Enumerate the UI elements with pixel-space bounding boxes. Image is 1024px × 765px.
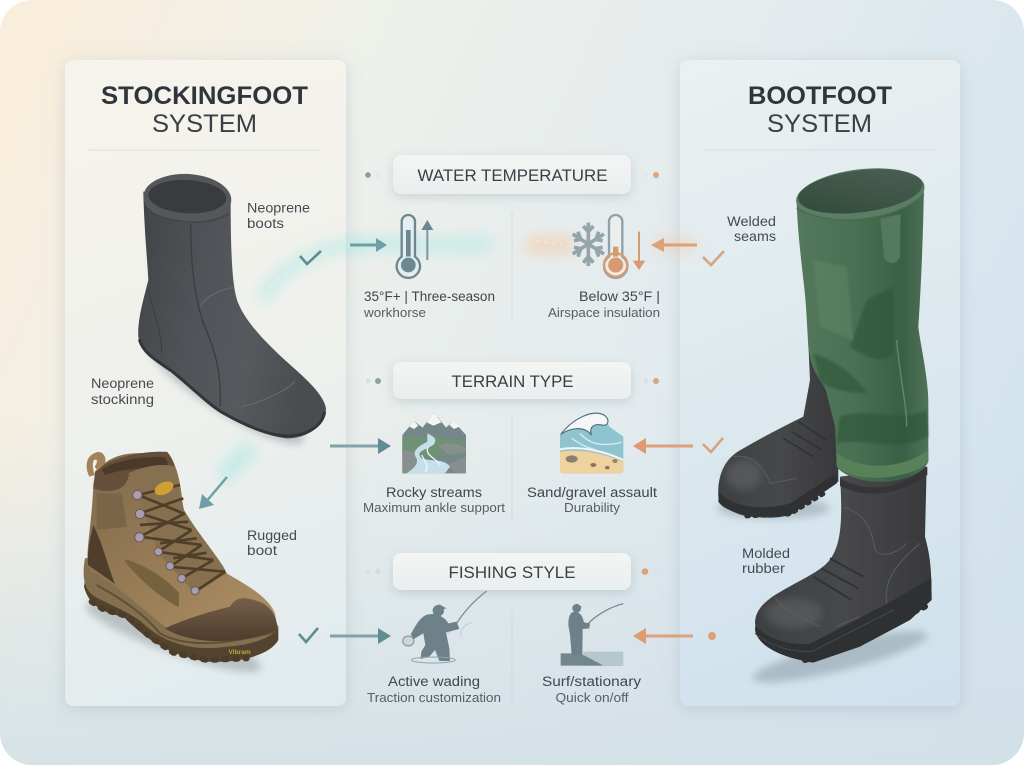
dots: row one [365, 172, 659, 178]
icon: thermometer warm [397, 215, 433, 278]
teal flow glow upper [262, 243, 360, 300]
label: welded seams: seams [734, 229, 776, 244]
laces [138, 485, 225, 592]
icon: snowflake [573, 223, 604, 266]
text: rocky streams [363, 485, 506, 515]
pill: fishing style [393, 553, 631, 590]
pill: water temperature: WATER TEMPERATURE [418, 167, 608, 185]
arrow: teal to thermometer [350, 238, 387, 252]
label: rugged boot [247, 528, 297, 558]
tongue [128, 465, 227, 593]
text: rocky streams: Rocky streams [386, 485, 482, 500]
text: sand and gravel: Sand/gravel assault [527, 485, 657, 500]
side panel [125, 559, 179, 607]
icon: surf stationary angler [561, 604, 623, 666]
icon: thermometer cold [604, 215, 645, 278]
glow: orange flow [525, 236, 695, 254]
label: neoprene boots: Neoprene [247, 200, 310, 216]
label: rugged boot: boot [247, 543, 277, 558]
top opening [793, 162, 928, 226]
sole logo: Vibram [228, 649, 251, 656]
text: cold water: Below 35°F | [579, 289, 660, 304]
label: welded seams [727, 214, 776, 244]
label: neoprene stocking: Neoprene [91, 376, 154, 391]
panel: bootfoot system [680, 60, 960, 706]
dots: row two [366, 378, 659, 384]
label: neoprene stocking: stockinng [91, 392, 154, 407]
toe cap [165, 598, 277, 641]
front boot [755, 467, 932, 660]
text: active wading [367, 674, 501, 705]
eyelets [133, 490, 199, 595]
icon: check teal lower [299, 628, 318, 642]
heading: bootfoot: SYSTEM [767, 110, 872, 138]
label: rugged boot: Rugged [247, 528, 297, 543]
text: warm water: workhorse [363, 306, 426, 320]
icon: rugged hiking boot [80, 452, 278, 684]
arrow: teal to active wading [330, 628, 391, 644]
rear boot [718, 343, 838, 518]
yellow logo [152, 479, 176, 498]
glow: teal flow [352, 238, 492, 251]
arrow: orange to surf [633, 628, 693, 644]
icon: check teal upper [300, 251, 321, 264]
text: active wading: Active wading [388, 674, 480, 689]
strap [880, 214, 901, 263]
icon: wave on sand [560, 413, 623, 473]
arrow: orange to sand [633, 438, 693, 454]
arrow down [633, 232, 645, 270]
icon: check orange middle [703, 438, 723, 452]
heel shadow panel [88, 525, 115, 584]
pill: terrain type [393, 362, 631, 399]
section: fishing style [330, 553, 693, 705]
pill: water temperature [393, 155, 631, 194]
arrow up [421, 220, 433, 260]
text: cold water [548, 289, 660, 320]
upper [87, 452, 276, 640]
heading: stockingfoot: SYSTEM [152, 110, 257, 138]
label: molded rubber [742, 546, 790, 576]
icon: mountain stream [402, 412, 466, 473]
pill: terrain type: TERRAIN TYPE [452, 373, 574, 391]
text: active wading: Traction customization [367, 691, 501, 705]
text: warm water [363, 289, 495, 320]
label: molded rubber: rubber [742, 561, 786, 576]
section: terrain type [330, 362, 693, 520]
text: surf stationary [542, 674, 641, 705]
panel: stockingfoot system [65, 60, 360, 706]
text: warm water: 35°F+ | Three-season [364, 289, 495, 304]
label: neoprene boots: boots [247, 216, 284, 231]
green leg [797, 183, 928, 482]
label: molded rubber: Molded [742, 546, 790, 561]
icon: check orange upper [703, 251, 724, 265]
text: rocky streams: Maximum ankle support [363, 501, 506, 515]
text: surf stationary: Quick on/off [556, 691, 629, 705]
text: surf stationary: Surf/stationary [542, 674, 641, 689]
heading: bootfoot [748, 82, 892, 138]
text: sand and gravel: Durability [564, 501, 621, 515]
label: neoprene stocking [91, 376, 154, 407]
label: welded seams: Welded [727, 214, 776, 229]
pull tab [87, 452, 105, 477]
arrow: diagonal teal to rugged boot [199, 446, 252, 509]
icon: neoprene stocking boot [138, 172, 326, 458]
pill: fishing style: FISHING STYLE [448, 564, 576, 582]
collar [93, 452, 175, 491]
midsole [84, 557, 278, 648]
arrow: orange to thermometer [651, 238, 697, 252]
section: water temperature [350, 155, 697, 320]
icon: active wading angler [403, 591, 487, 663]
icon: bootfoot wader [717, 162, 932, 692]
heading: bootfoot: BOOTFOOT [748, 82, 892, 110]
text: cold water: Airspace insulation [548, 306, 660, 320]
heading: stockingfoot: STOCKINGFOOT [101, 82, 308, 110]
label: neoprene boots [247, 200, 310, 231]
arrow: teal to rocky streams [330, 438, 391, 454]
dots: row three [366, 568, 658, 575]
heading: stockingfoot [101, 82, 308, 138]
outsole [84, 580, 278, 662]
icon: orange dot [708, 632, 716, 640]
text: sand and gravel [527, 485, 657, 515]
